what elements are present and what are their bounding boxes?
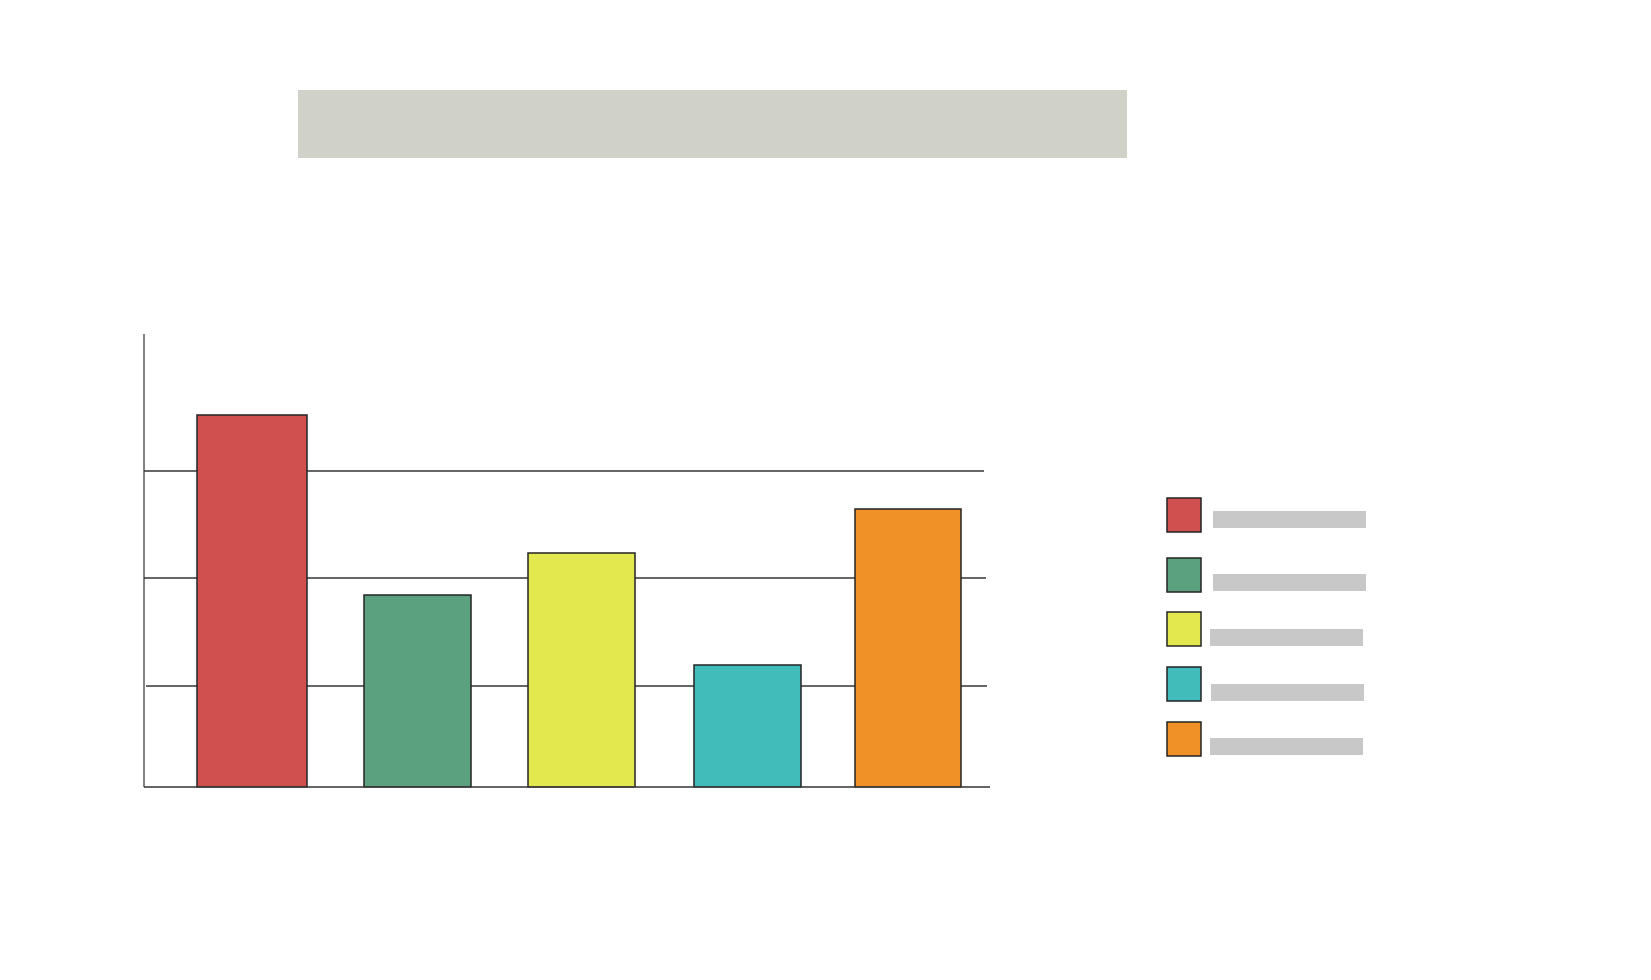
bar: orange	[855, 509, 961, 787]
title bar	[298, 90, 1127, 158]
bar: yellow	[528, 553, 635, 787]
legend item: yellow	[1167, 612, 1363, 646]
legend item: red	[1167, 498, 1366, 532]
bar: red	[197, 415, 307, 787]
legend item: orange	[1167, 722, 1363, 756]
bar chart	[144, 334, 990, 787]
bar: green	[364, 595, 471, 787]
legend item: teal	[1167, 667, 1364, 701]
legend item: green	[1167, 558, 1366, 592]
legend	[1167, 498, 1366, 756]
bar: teal	[694, 665, 801, 787]
